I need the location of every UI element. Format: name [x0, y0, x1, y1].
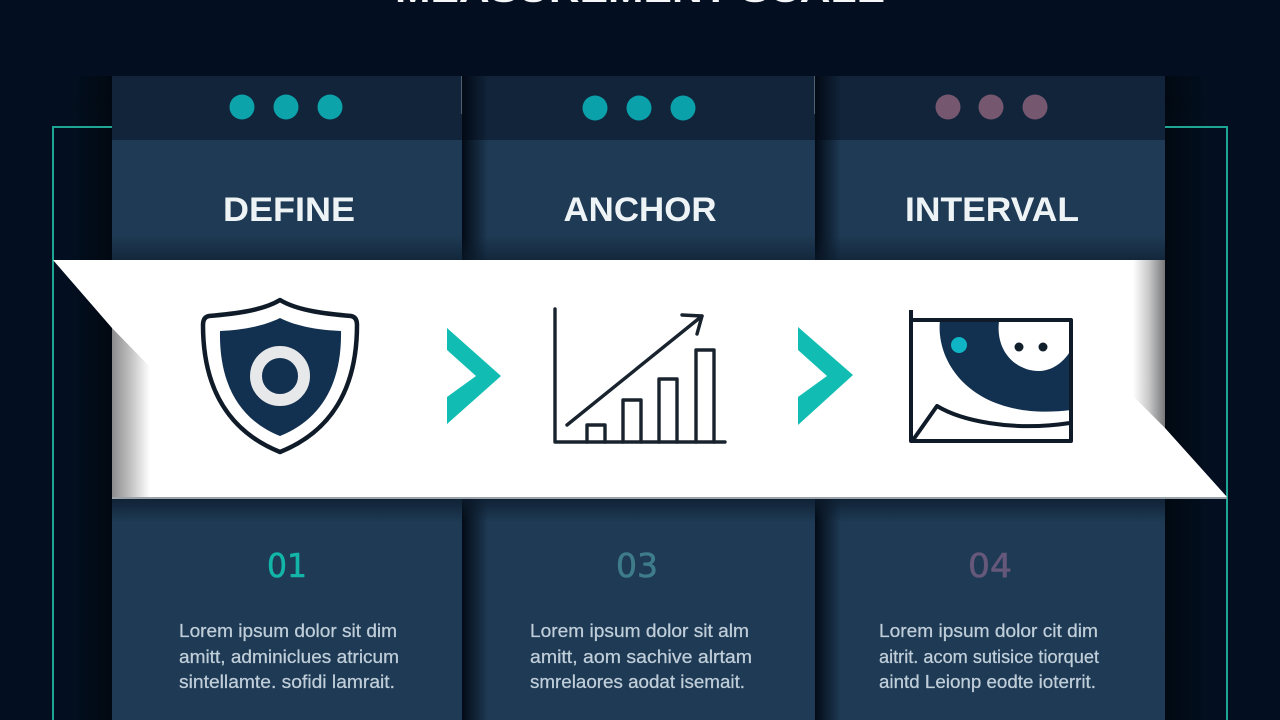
text block: define description: sintellamte. sofidi lamrait.	[179, 671, 395, 692]
panel: anchor column	[462, 76, 816, 720]
text block: interval description: aitrit. acom sutisice tiorquet	[879, 646, 1099, 667]
icon: interval picture frame	[911, 310, 1071, 441]
status dots: define	[230, 94, 342, 120]
number: 01: 01	[267, 546, 307, 585]
text block: anchor description	[530, 620, 752, 692]
heading: interval: INTERVAL	[905, 191, 1079, 229]
text block: interval description: Lorem ipsum dolor cit dim	[879, 620, 1098, 641]
number: 03: 03	[616, 546, 658, 585]
icon: shield	[203, 300, 357, 452]
heading: anchor: ANCHOR	[564, 191, 716, 229]
text block: anchor description: Lorem ipsum dolor sit alm	[530, 620, 749, 641]
arrow: anchor to interval	[798, 327, 853, 425]
text block: define description: amitt, adminiclues atricum	[179, 646, 399, 667]
number: 04: 04	[968, 546, 1012, 585]
panel: interval column	[815, 76, 1165, 720]
arrow: define to anchor	[447, 328, 501, 424]
text block: anchor description: smrelaores aodat isemait.	[530, 671, 745, 692]
white ribbon banner	[53, 260, 1227, 499]
text block: anchor description: amitt, aom sachive alrtam	[530, 646, 752, 667]
status dots: interval	[936, 94, 1048, 120]
status dots: anchor	[582, 96, 696, 120]
panel: define column	[112, 76, 462, 720]
text block: interval description	[879, 620, 1099, 692]
teal frame outline	[53, 127, 1227, 720]
heading: define: DEFINE	[223, 191, 355, 229]
icon: bar chart with rising arrow	[555, 309, 725, 442]
text block: define description	[179, 620, 399, 692]
text block: define description: Lorem ipsum dolor sit dim	[179, 620, 397, 641]
text block: interval description: aintd Leionp eodte ioterrit.	[879, 671, 1096, 692]
